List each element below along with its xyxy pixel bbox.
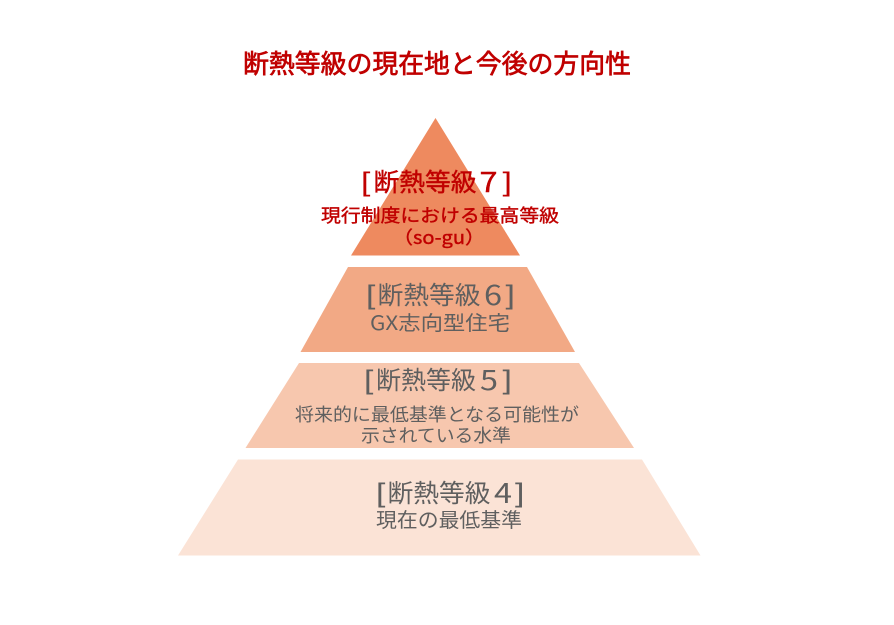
label: level 5: 示されている水準	[361, 422, 511, 448]
label: level 5: 将来的に最低基準となる可能性が	[295, 401, 579, 427]
label: level 7: ]	[502, 167, 512, 197]
label: level 7: 7	[480, 160, 497, 200]
label: level 6: 6	[484, 273, 502, 313]
label: level 5: 5	[480, 358, 498, 398]
label: level 6	[366, 273, 515, 336]
label: level 7: [	[361, 167, 371, 197]
label: level 7: 断熱等級	[374, 163, 476, 199]
tier: level 5 shape	[246, 363, 634, 448]
label: level 5: ]	[502, 365, 512, 395]
label: level 7: （so-gu）	[393, 224, 485, 250]
label: level 6: GX志向型住宅	[370, 307, 510, 336]
label: level 4: ]	[515, 478, 524, 508]
tier: level 7 shape	[351, 118, 520, 256]
label: level 4: [	[376, 478, 386, 508]
tier: level 4 shape	[178, 460, 700, 556]
label: level 7	[321, 160, 559, 250]
label: level 4: 現在の最低基準	[376, 504, 522, 533]
title: 断熱等級の現在地と今後の方向性	[243, 44, 631, 81]
label: level 5: 断熱等級	[376, 361, 476, 397]
tier: level 6 shape	[300, 267, 575, 352]
label: level 5	[295, 358, 579, 448]
label: level 6: ]	[506, 280, 515, 310]
label: level 6: 断熱等級	[378, 276, 480, 312]
label: level 4	[376, 471, 524, 533]
pyramid	[178, 118, 700, 556]
label: level 4: 断熱等級	[388, 474, 490, 510]
label: level 4: 4	[494, 471, 512, 511]
label: level 7: 現行制度における最高等級	[321, 202, 559, 228]
label: level 6: [	[366, 280, 376, 310]
label: level 5: [	[364, 365, 374, 395]
